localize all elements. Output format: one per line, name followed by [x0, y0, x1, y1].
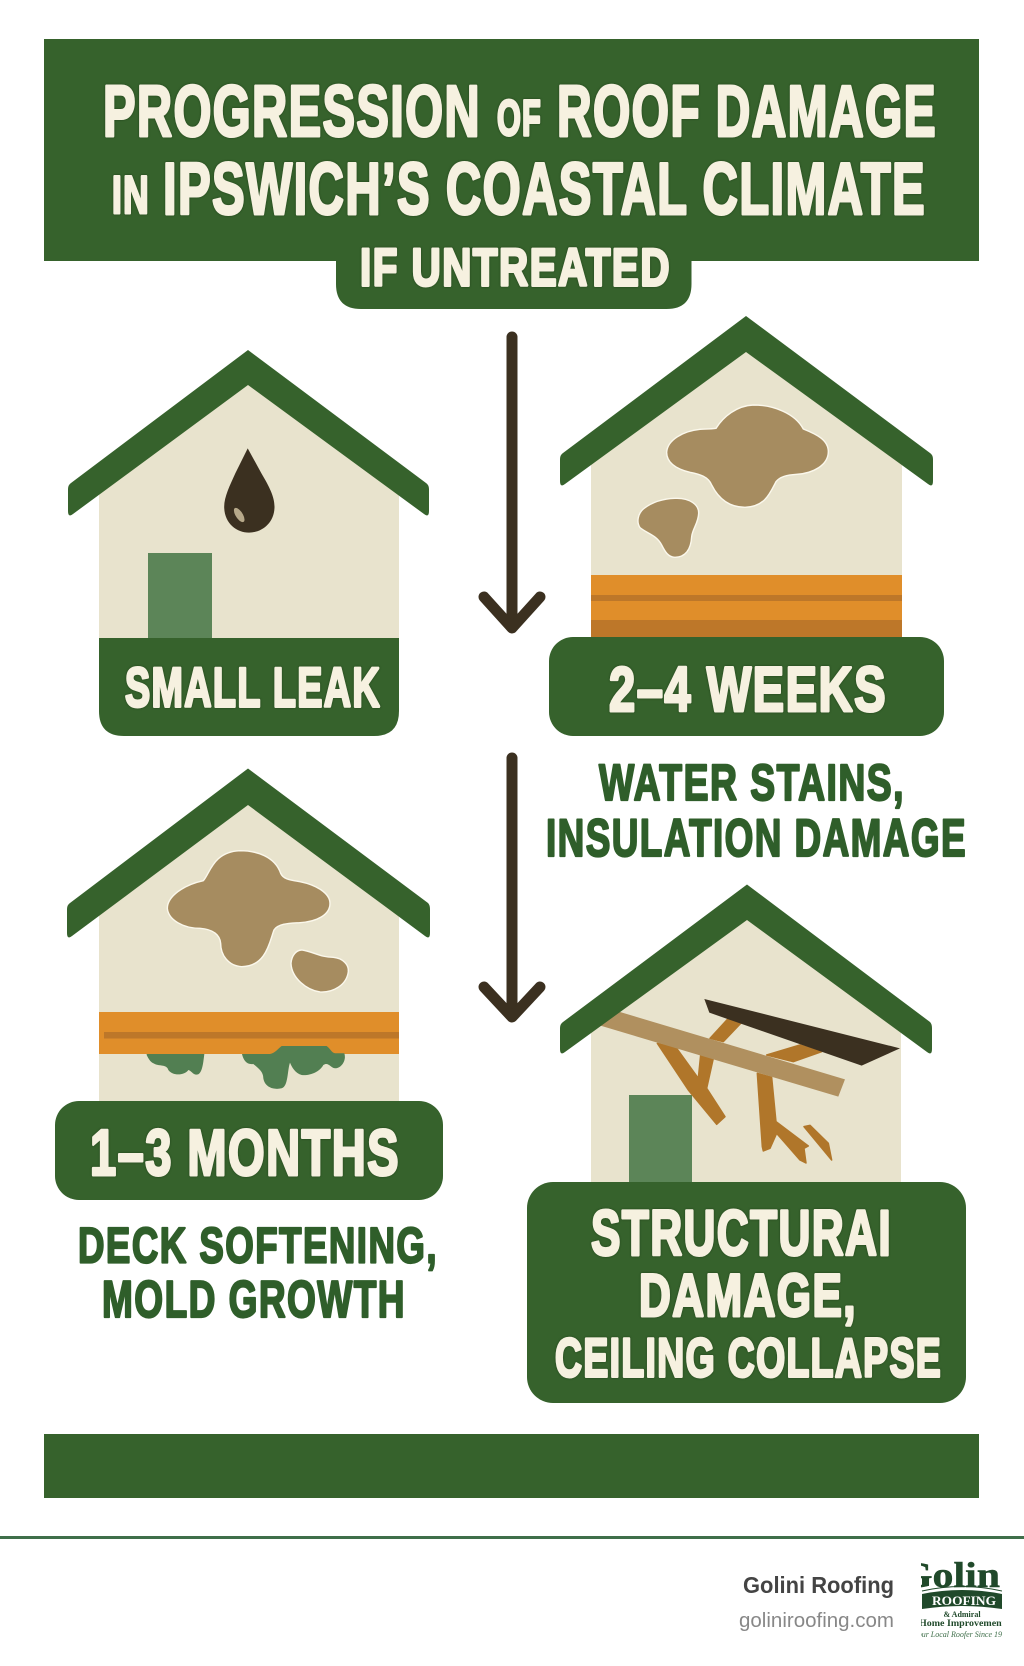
roof: [560, 316, 933, 485]
label: structural damage: [527, 1182, 966, 1403]
footer brand text: Golini Roofing: [743, 1572, 894, 1598]
subtitle tab: IF UNTREATED: [360, 238, 671, 298]
caption: water stains, insulation damage: [546, 754, 967, 868]
logo: [921, 1562, 1002, 1639]
water stains: [638, 405, 828, 557]
logo: Golin: [900, 1555, 1000, 1595]
roof: [560, 884, 932, 1053]
label: structural damage: STRUCTURAI: [591, 1197, 892, 1269]
label: 1-3 months: 1–3 MONTHS: [90, 1116, 400, 1189]
logo: & Admiral: [943, 1610, 981, 1619]
label: small leak: [99, 638, 399, 736]
house wall: [99, 785, 399, 1102]
panel: 2-4 weeks house: [549, 316, 944, 736]
label: small leak: SMALL LEAK: [125, 656, 381, 718]
house wall: [591, 905, 901, 1184]
arrow: second step: [484, 758, 540, 1017]
door: [148, 553, 212, 639]
label: 2-4 weeks: [549, 637, 944, 736]
damaged insulation: [591, 575, 902, 638]
title: IN: [112, 166, 150, 225]
broken rafters: [598, 999, 900, 1163]
logo: Home Improvement: [919, 1618, 1005, 1628]
softened deck: [99, 1012, 399, 1054]
footer rule: [0, 1536, 1024, 1539]
house wall: [99, 370, 399, 640]
label: 2-4 weeks: 2–4 WEEKS: [609, 655, 887, 725]
panel: small leak house: [68, 350, 429, 736]
label: structural damage: DAMAGE,: [639, 1262, 857, 1329]
bottom banner: [44, 1434, 979, 1498]
roof: [68, 350, 429, 515]
door: [629, 1095, 692, 1184]
mold growth: [147, 1046, 345, 1089]
logo banner: ROOFING: [932, 1594, 996, 1608]
footer brand text: goliniroofing.com: [739, 1610, 894, 1632]
panel: 1-3 months house: [55, 768, 443, 1200]
caption: deck softening, mold growth: [78, 1218, 438, 1329]
caption: deck softening, mold growth: MOLD GROWTH: [102, 1271, 406, 1329]
logo: Your Local Roofer Since 1985: [914, 1630, 1010, 1639]
panel: structural damage house: [527, 884, 966, 1403]
title: PROGRESSION: [103, 72, 481, 152]
title: OF: [497, 90, 542, 146]
footer brand text: [739, 1572, 894, 1632]
label: 1-3 months: [55, 1101, 443, 1200]
header banner: [44, 39, 979, 309]
title: [103, 72, 937, 230]
caption: water stains, insulation damage: WATER STAINS,: [599, 754, 905, 811]
arrow: first step: [484, 337, 540, 628]
water stains: [167, 851, 348, 992]
roof: [67, 768, 430, 937]
icon: water drop: [224, 448, 275, 533]
house wall: [591, 340, 902, 576]
caption: deck softening, mold growth: DECK SOFTENING,: [78, 1218, 438, 1274]
